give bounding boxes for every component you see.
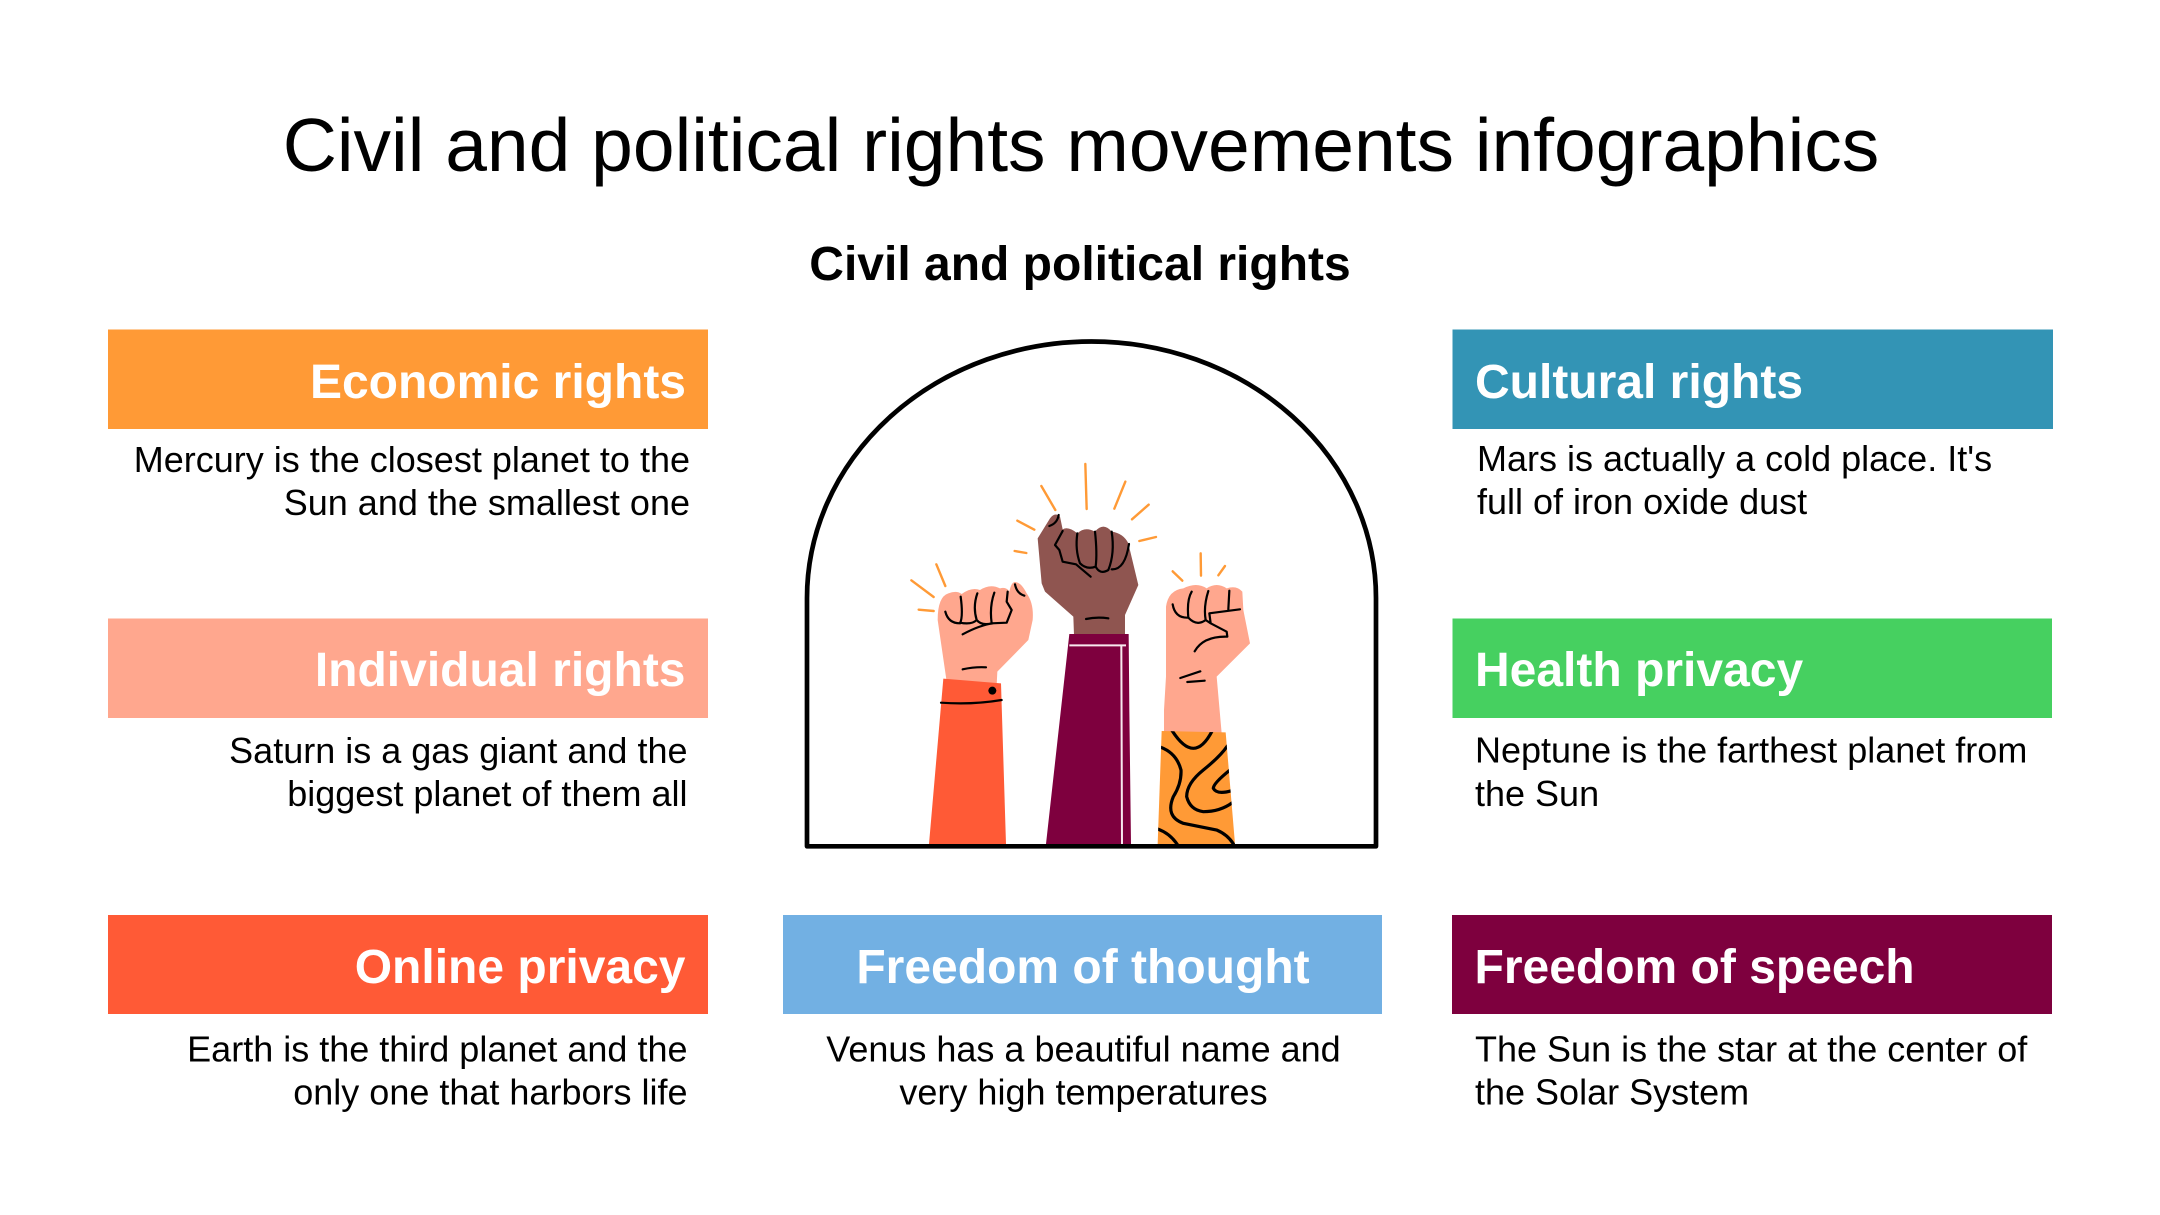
panel: freedom of thought: Freedom of thought	[856, 941, 1310, 994]
panel: freedom of thought: Venus has a beautiful name and	[826, 1028, 1341, 1070]
panel: health privacy	[1452, 618, 2052, 814]
panel: freedom of speech	[1452, 915, 2052, 1112]
panel: online privacy: Online privacy	[355, 941, 686, 994]
panel: individual rights: Individual rights	[315, 644, 686, 697]
panel: freedom of thought: very high temperatures	[899, 1072, 1268, 1112]
panel: freedom of speech: the Solar System	[1475, 1072, 1749, 1112]
icon: left fist	[911, 564, 1033, 685]
panel: individual rights: Saturn is a gas giant and the	[229, 730, 688, 771]
panel: online privacy	[108, 915, 708, 1112]
panel: individual rights: biggest planet of them all	[287, 773, 688, 814]
icon: middle fist and sleeve	[1015, 464, 1156, 844]
panel: economic rights: Economic rights	[310, 356, 686, 409]
panel: economic rights: Sun and the smallest one	[284, 482, 690, 523]
icon: left sleeve	[929, 667, 1006, 844]
panel: freedom of thought	[783, 915, 1382, 1112]
panel: online privacy: only one that harbors life	[293, 1072, 688, 1112]
panel: health privacy: the Sun	[1475, 773, 1599, 814]
title: Civil and political rights movements infographics	[283, 103, 1879, 187]
panel: freedom of speech: Freedom of speech	[1474, 941, 1915, 994]
panel: cultural rights: Mars is actually a cold place. It's	[1477, 438, 1992, 479]
panel: freedom of speech: The Sun is the star at the center of	[1475, 1028, 2028, 1070]
panel: cultural rights	[1452, 330, 2053, 522]
panel: health privacy: Health privacy	[1475, 644, 1803, 697]
panel: economic rights	[108, 330, 708, 523]
panel: cultural rights: Cultural rights	[1475, 356, 1803, 409]
panel: health privacy: Neptune is the farthest planet from	[1475, 730, 2027, 770]
panel: online privacy: Earth is the third planet and the	[187, 1028, 688, 1070]
subtitle: Civil and political rights	[809, 238, 1351, 291]
panel: economic rights: Mercury is the closest planet to the	[134, 439, 690, 480]
panel: cultural rights: full of iron oxide dust	[1477, 481, 1807, 522]
raised fists illustration	[911, 464, 1250, 845]
icon: right fist	[1164, 553, 1250, 733]
panel: individual rights	[108, 618, 708, 814]
arch frame	[807, 341, 1376, 846]
icon: right sleeve	[1158, 730, 1235, 845]
